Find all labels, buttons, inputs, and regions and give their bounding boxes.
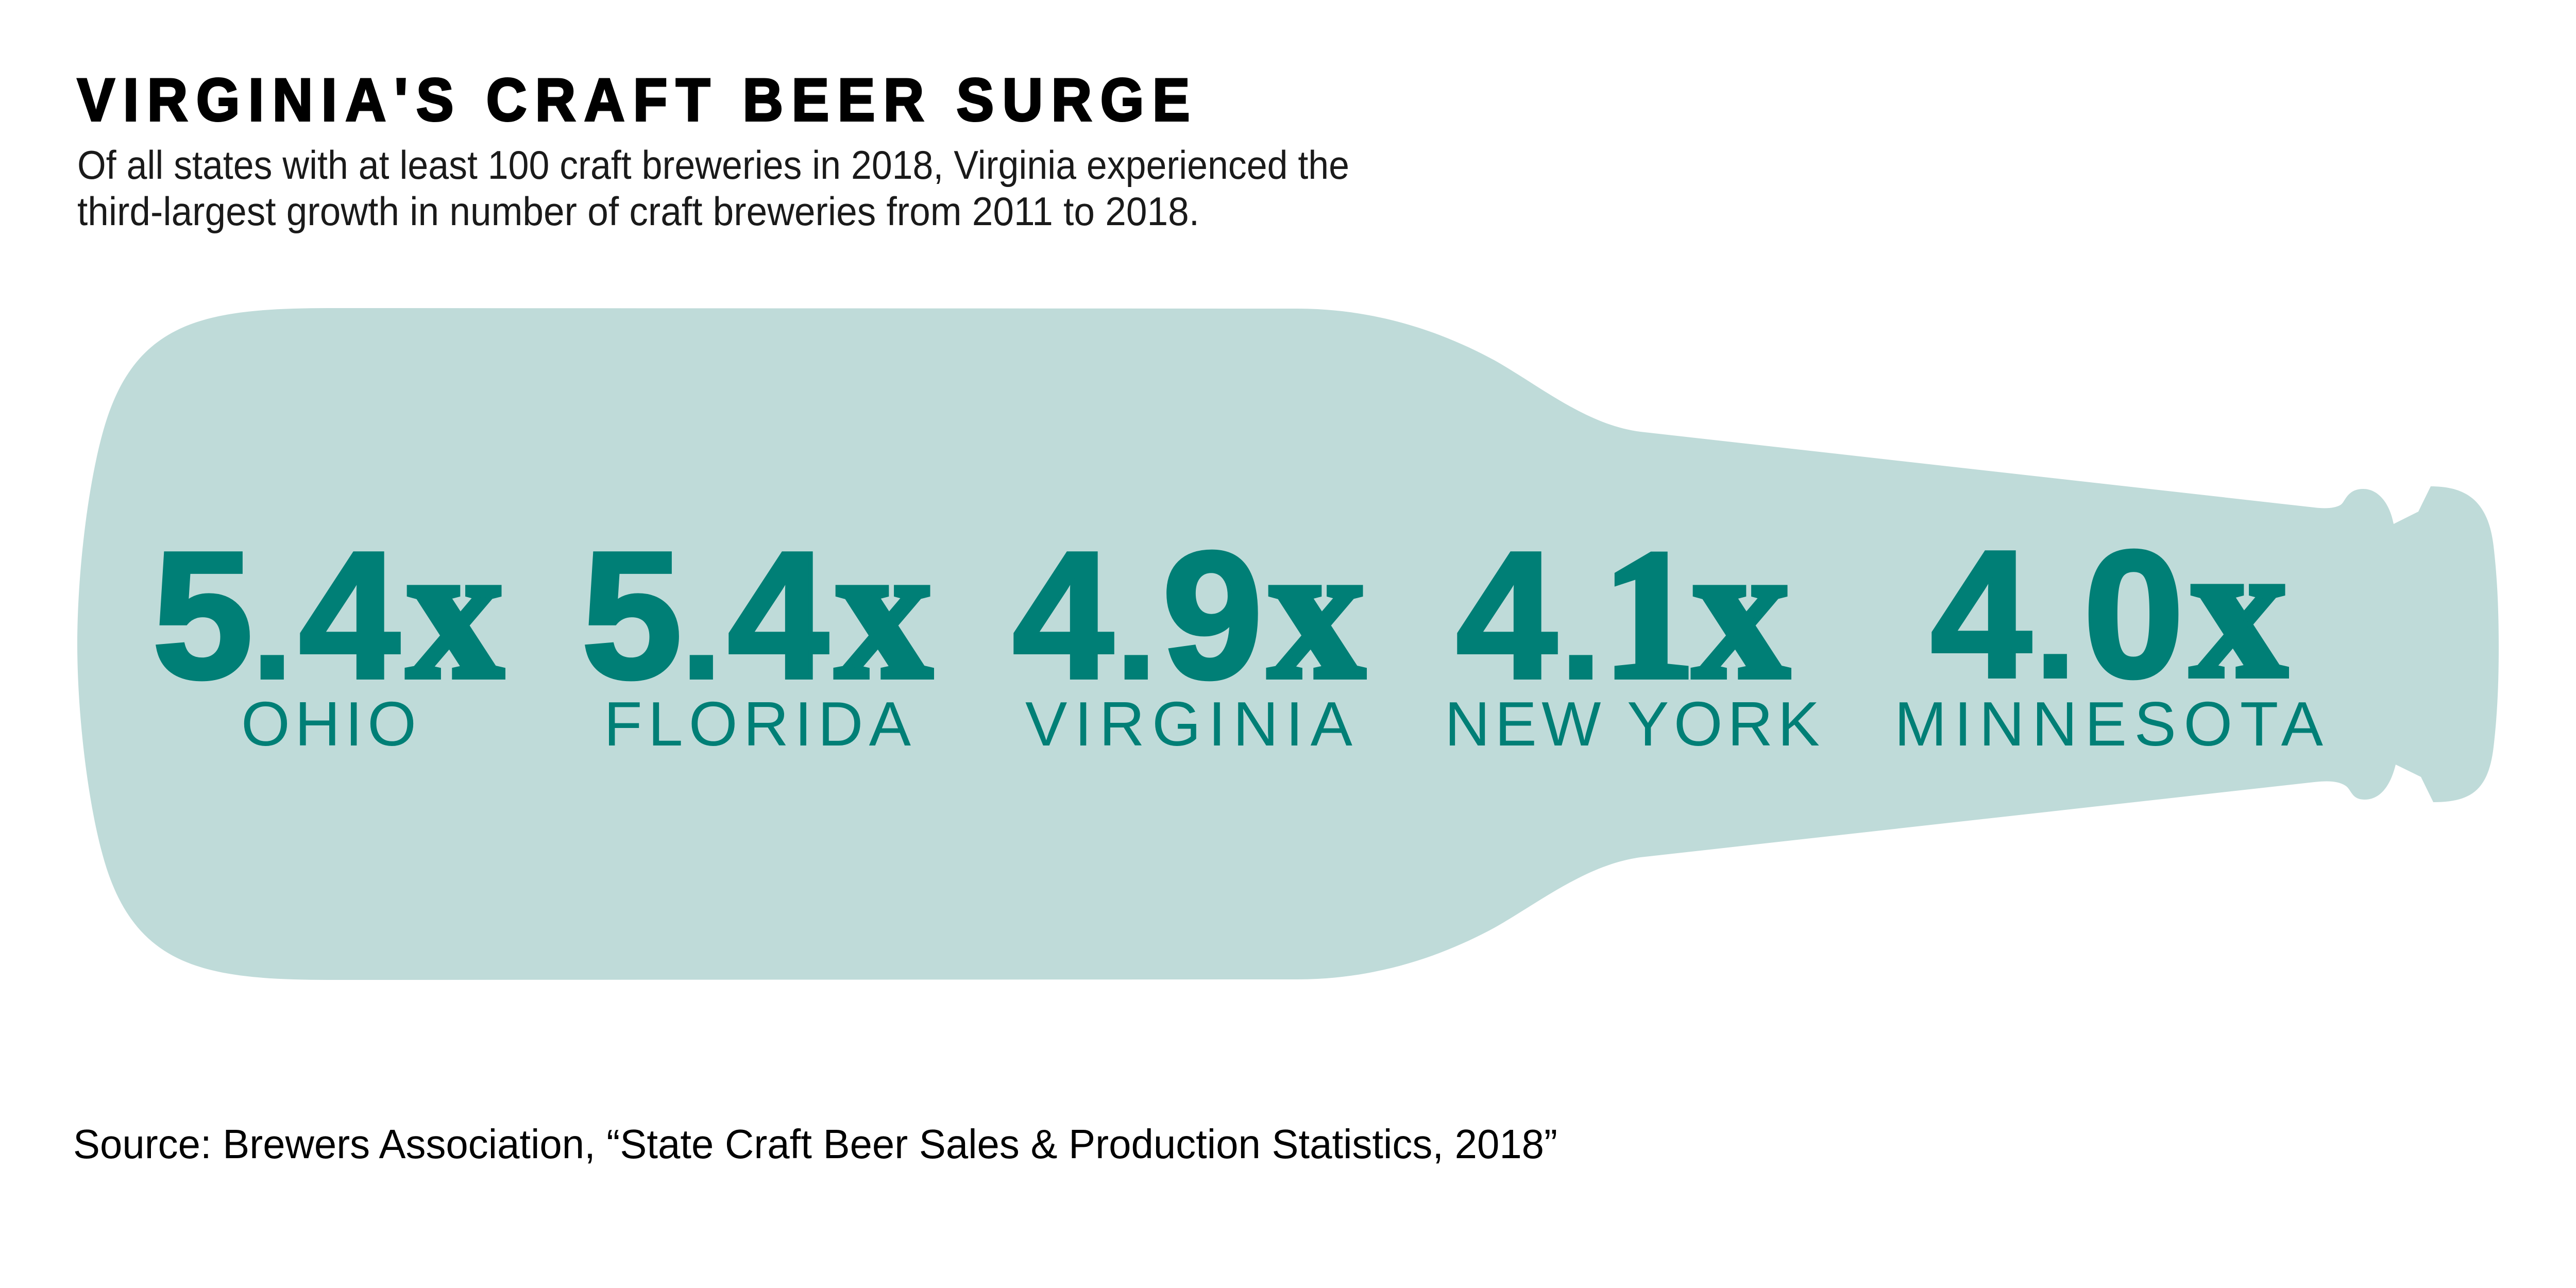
- stat: Minnesota: 4: [1931, 514, 2032, 715]
- stat: Ohio: .: [249, 530, 295, 715]
- stat: New York: NEW YORK: [1445, 689, 1820, 759]
- stat: Virginia: 4: [1013, 515, 1114, 716]
- stat: New York: [1445, 505, 1820, 759]
- stat: Florida: [582, 505, 932, 759]
- subtitle text block: third-largest growth in number of craft breweries from 2011 to 2018.: [77, 189, 1199, 234]
- stat: New York: 4: [1456, 515, 1558, 716]
- subtitle text block: Of all states with at least 100 craft breweries in 2018, Virginia experienced the: [77, 142, 1349, 188]
- stat: Ohio: x: [407, 505, 503, 718]
- bottle silhouette: [77, 308, 2499, 980]
- stat: Florida: .: [679, 530, 724, 715]
- stat: Florida: 4: [728, 515, 829, 716]
- stat: Virginia: x: [1268, 505, 1365, 718]
- stat: Minnesota: [1894, 504, 2324, 759]
- stat: Virginia: .: [1113, 530, 1159, 715]
- stat: Minnesota: 0: [2083, 514, 2184, 715]
- stat: Virginia: 9: [1162, 515, 1263, 716]
- stat: Ohio: 5: [152, 515, 253, 716]
- stat: Florida: FLORIDA: [604, 689, 911, 759]
- stat: Virginia: VIRGINIA: [1025, 689, 1353, 759]
- stat: Minnesota: .: [2032, 529, 2078, 714]
- stat: New York: 1: [1603, 513, 1695, 717]
- stat: New York: x: [1693, 505, 1789, 718]
- source note: Source: Brewers Association, “State Craft Beer Sales & Production Statistics, 2018”: [73, 1121, 1557, 1167]
- stat: Minnesota: x: [2191, 504, 2287, 717]
- subtitle text block: [77, 142, 1349, 234]
- stat: Virginia: [1013, 505, 1365, 759]
- stat: Ohio: [152, 505, 503, 759]
- stat: Ohio: OHIO: [241, 689, 416, 759]
- stat: Florida: x: [836, 505, 932, 718]
- stat: New York: .: [1558, 530, 1604, 715]
- stat: Ohio: 4: [299, 515, 401, 716]
- stat: Florida: 5: [582, 515, 682, 716]
- title: VIRGINIA'S CRAFT BEER SURGE: [77, 66, 1190, 133]
- stat: Minnesota: MINNESOTA: [1894, 689, 2324, 759]
